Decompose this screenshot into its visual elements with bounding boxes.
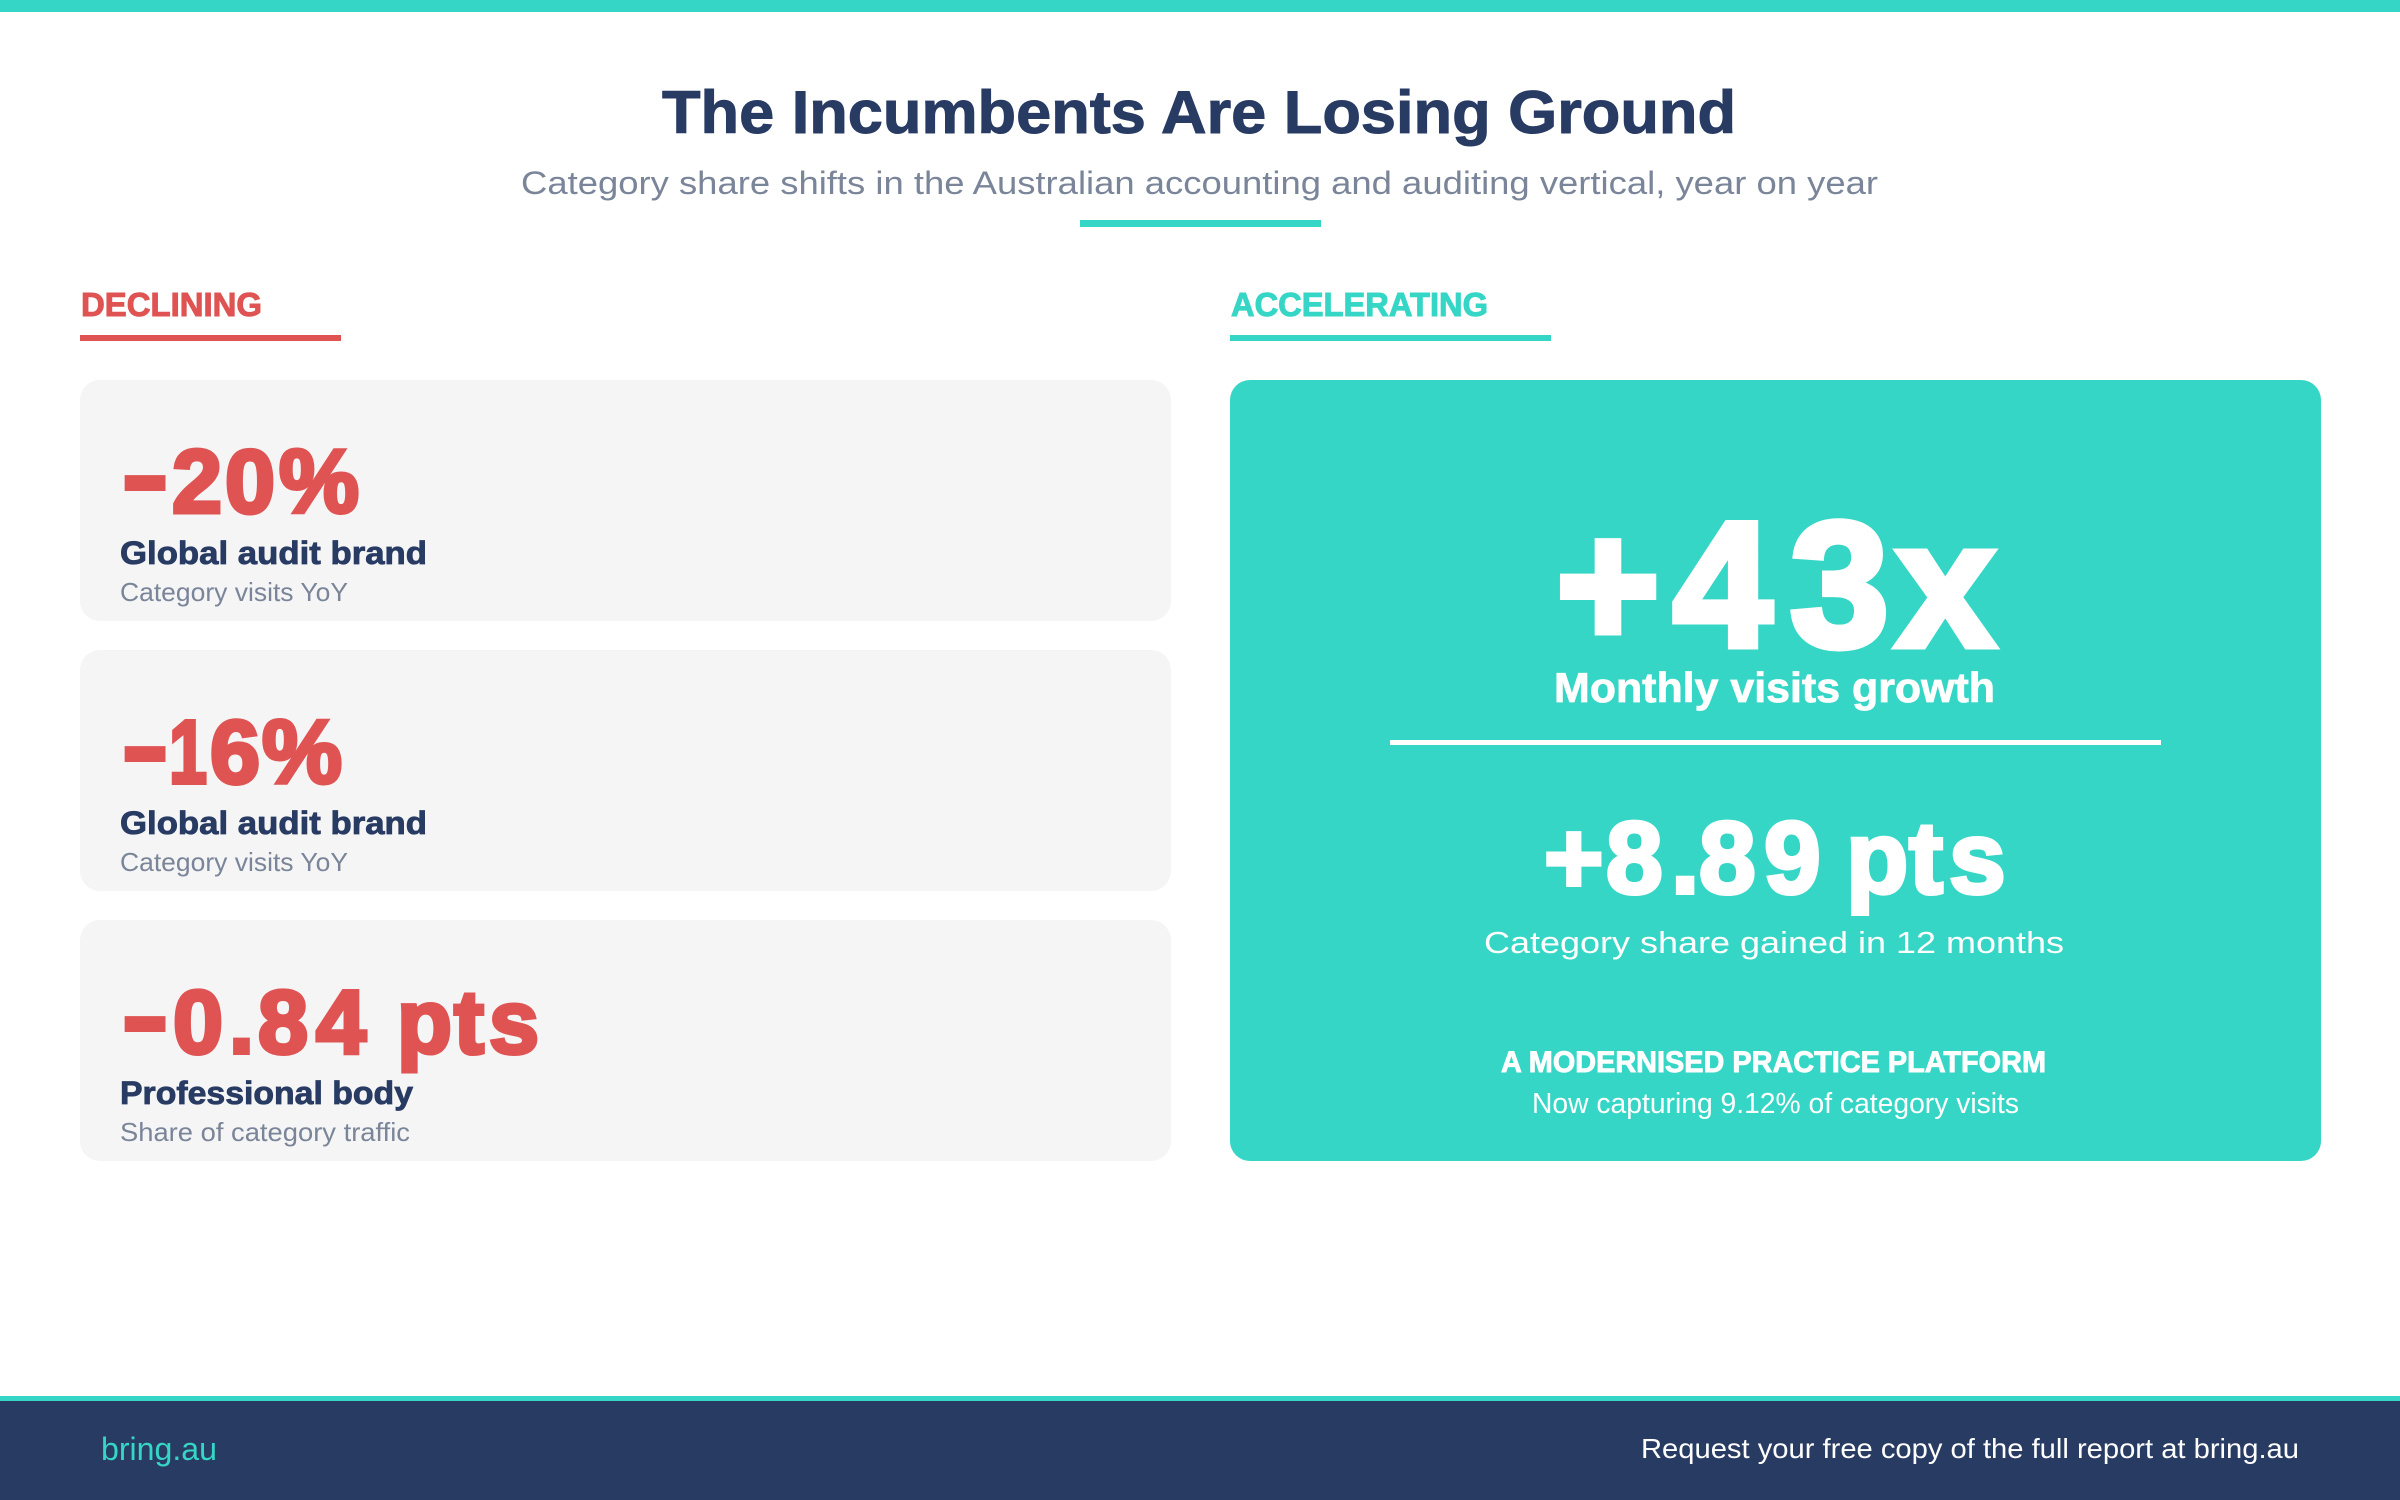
stat value: 6% bbox=[210, 703, 342, 803]
platform label: A MODERNISED PRACTICE PLATFORM bbox=[1501, 1046, 2046, 1079]
secondary stat label: Category share gained in 12 months bbox=[1484, 925, 2064, 960]
subtitle: Category share shifts in the Australian accounting and auditing vertical, year on year bbox=[521, 165, 1878, 201]
divider bbox=[1390, 740, 2161, 745]
stat value bbox=[124, 703, 342, 804]
header bbox=[521, 79, 1878, 227]
footer brand: bring.au bbox=[101, 1431, 217, 1467]
stat value: − bbox=[124, 704, 166, 804]
stat value: 20% bbox=[172, 432, 359, 532]
panel: stat card -16% bbox=[80, 650, 1171, 891]
panel: accelerating highlight bbox=[1230, 380, 2321, 1161]
big stat label: Monthly visits growth bbox=[1554, 664, 1995, 711]
platform note: Now capturing 9.12% of category visits bbox=[1532, 1088, 2019, 1120]
title underline bbox=[1080, 220, 1321, 227]
stat value: − bbox=[124, 433, 166, 533]
panel: stat card -0.84 pts bbox=[80, 920, 1171, 1161]
big stat +43x: +43x bbox=[1556, 485, 1995, 684]
stat description: Share of category traffic bbox=[120, 1117, 410, 1147]
section heading: accelerating: ACCELERATING bbox=[1231, 286, 1488, 323]
section heading: declining: DECLINING bbox=[81, 286, 262, 323]
section heading: accelerating bbox=[1230, 286, 1551, 341]
footer call to action: Request your free copy of the full report at bring.au bbox=[1641, 1433, 2299, 1464]
stat value: − bbox=[124, 974, 166, 1074]
panel: stat card -20% bbox=[80, 380, 1171, 621]
secondary stat +8.89 pts: +8.89 pts bbox=[1544, 801, 2006, 915]
top accent bar bbox=[0, 0, 2400, 12]
stat name: Global audit brand bbox=[120, 805, 427, 841]
stat description: Category visits YoY bbox=[120, 847, 348, 877]
title: The Incumbents Are Losing Ground bbox=[662, 79, 1736, 146]
section heading: declining bbox=[80, 286, 341, 341]
footer bbox=[0, 1396, 2400, 1500]
stat value: 1 bbox=[169, 703, 207, 803]
stat name: Global audit brand bbox=[120, 535, 427, 571]
stat value: 0.84 pts bbox=[173, 973, 539, 1073]
stat description: Category visits YoY bbox=[120, 577, 348, 607]
stat name: Professional body bbox=[120, 1075, 413, 1111]
